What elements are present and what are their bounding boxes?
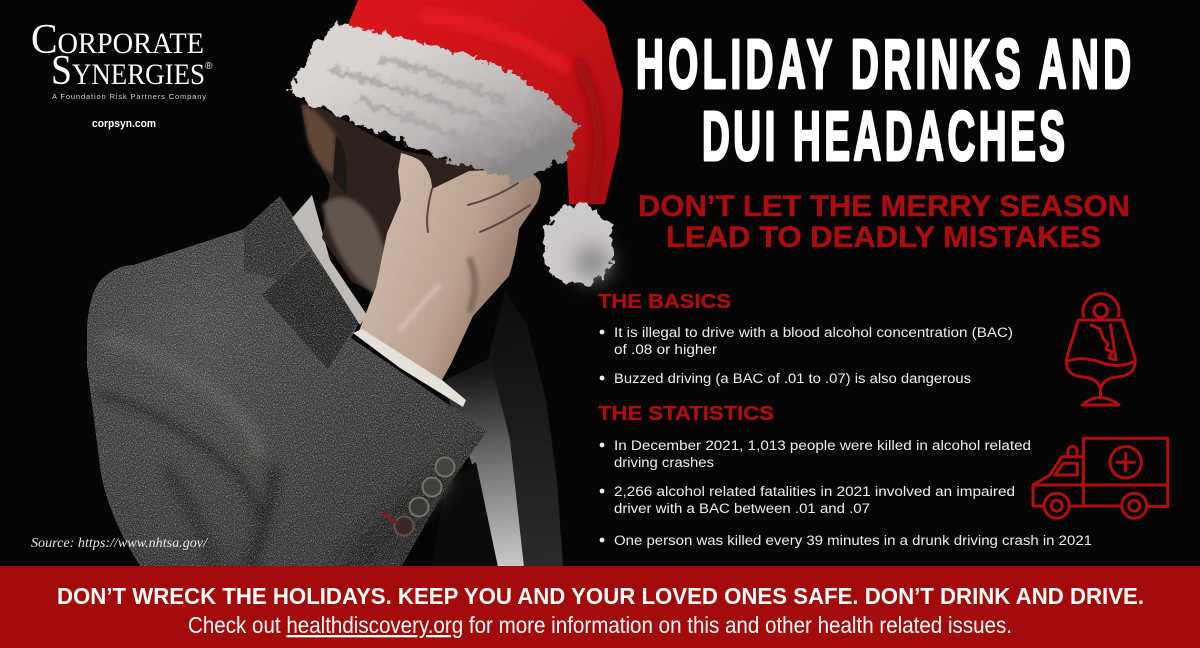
logo wordmark line 2: SYNERGIES xyxy=(51,48,205,94)
logo wordmark line 1: CORPORATE xyxy=(31,17,204,63)
subtitle line 1: DON’T LET THE MERRY SEASON xyxy=(638,190,1130,223)
heading: the statistics: THE STATISTICS xyxy=(598,402,774,425)
source note: Source: https://www.nhtsa.gov/ xyxy=(31,535,208,550)
statistics list: 2,266 alcohol related fatalities in 2021 involved an impaired xyxy=(614,484,1015,499)
lower lapel xyxy=(262,251,362,369)
title line 1: HOLIDAY DRINKS AND xyxy=(636,25,1131,103)
heading: the basics: THE BASICS xyxy=(598,290,731,313)
fur streaks xyxy=(330,58,530,155)
hat red body xyxy=(346,0,623,204)
icon: ambulance xyxy=(1033,438,1168,518)
ear xyxy=(302,104,336,176)
banner background xyxy=(0,566,1200,648)
section: the basics xyxy=(598,290,1013,386)
hat pompom xyxy=(542,205,614,285)
title xyxy=(636,25,1131,175)
shirt xyxy=(442,358,524,567)
section: the statistics xyxy=(598,402,1092,548)
finger creases xyxy=(400,183,530,330)
banner headline: DON’T WRECK THE HOLIDAYS. KEEP YOU AND YOUR LOVED ONES SAFE. DON’T DRINK AND DRIVE. xyxy=(57,583,1144,609)
sleeve xyxy=(262,338,487,567)
photo: man with santa hat covering his face xyxy=(87,0,623,567)
footer banner xyxy=(0,566,1200,648)
tie xyxy=(432,462,498,567)
jacket xyxy=(87,196,487,567)
jacket body xyxy=(87,196,487,567)
jacket right side xyxy=(488,290,563,567)
banner sub line: Check out healthdiscovery.org for more information on this and other health related issues. xyxy=(188,612,1012,638)
tagline: A Foundation Risk Partners Company xyxy=(52,92,206,101)
title line 2: DUI HEADACHES xyxy=(702,97,1065,175)
white shirt cuff xyxy=(353,329,466,407)
shirt collar xyxy=(292,195,367,325)
basics list: of .08 or higher xyxy=(614,342,718,357)
basics list: Buzzed driving (a BAC of .01 to .07) is also dangerous xyxy=(614,371,971,386)
statistics list: driving crashes xyxy=(614,455,714,470)
subtitle xyxy=(638,190,1130,254)
icon: wine glass with car key xyxy=(1066,294,1135,405)
statistics list: driver with a BAC between .01 and .07 xyxy=(614,501,870,516)
basics list: It is illegal to drive with a blood alcohol concentration (BAC) xyxy=(614,325,1013,340)
basics list xyxy=(600,325,1013,386)
subtitle line 2: LEAD TO DEADLY MISTAKES xyxy=(666,221,1101,254)
hand xyxy=(359,153,541,380)
head and beard xyxy=(301,103,510,310)
logo: Corporate Synergies xyxy=(31,17,213,130)
statistics list: One person was killed every 39 minutes in a drunk driving crash in 2021 xyxy=(614,533,1092,548)
website: corpsyn.com xyxy=(92,118,156,130)
red buttonhole xyxy=(382,513,397,523)
upper lapel xyxy=(244,196,309,280)
sleeve buttons xyxy=(394,458,454,536)
statistics list: In December 2021, 1,013 people were killed in alcohol related xyxy=(614,438,1031,453)
hat fur brim xyxy=(289,22,578,182)
registered mark: ® xyxy=(205,61,213,72)
statistics list xyxy=(600,438,1092,548)
jacket folds xyxy=(100,340,440,567)
